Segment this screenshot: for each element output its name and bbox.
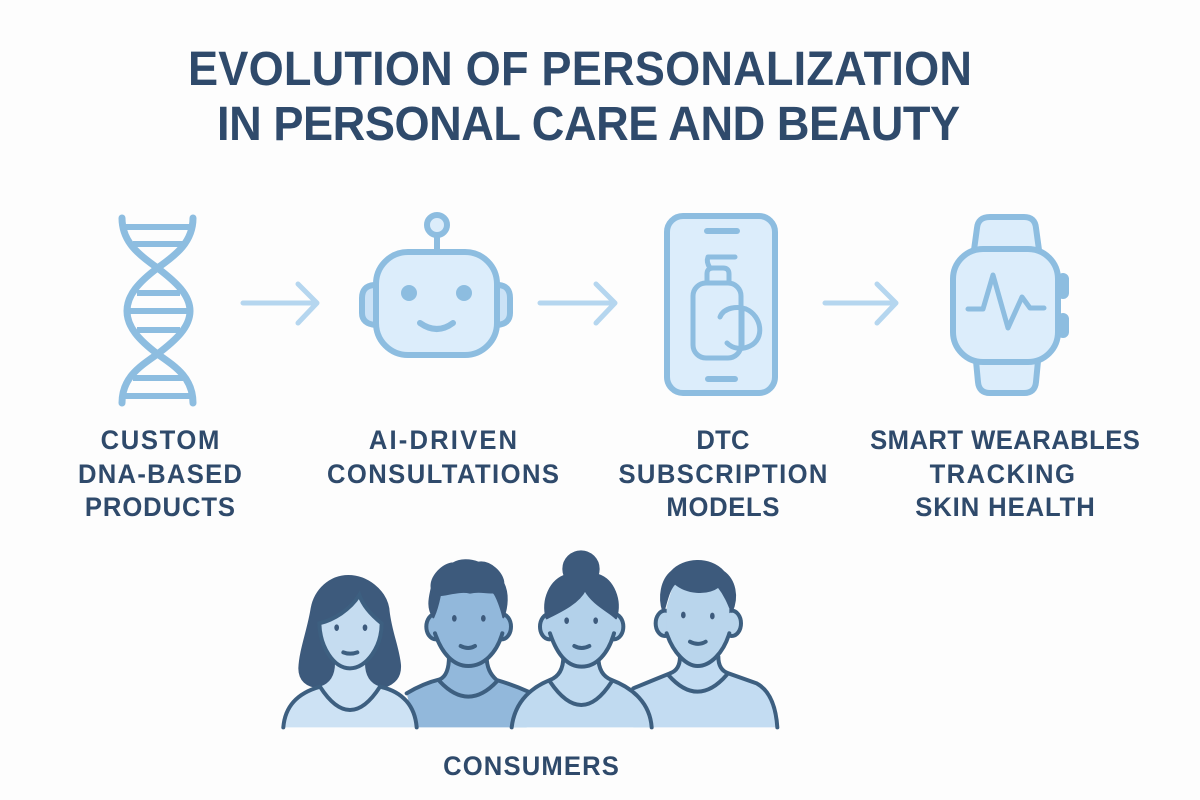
title: IN PERSONAL CARE AND BEAUTY [217, 97, 960, 150]
label: consumers: CONSUMERS [443, 750, 619, 781]
label: AI-driven consultations: CONSULTATIONS [327, 458, 559, 489]
title: EVOLUTION OF PERSONALIZATION [188, 42, 972, 95]
arrow: AI to DTC [540, 284, 615, 323]
label: DTC subscription models: DTC [696, 424, 750, 455]
label: AI-driven consultations: AI-DRIVEN [369, 424, 517, 455]
icon: smartwatch [953, 217, 1066, 393]
label: smart wearables tracking skin health: TRACKING [930, 458, 1075, 489]
label: custom DNA-based products: PRODUCTS [85, 491, 235, 522]
label: AI-driven consultations [327, 424, 559, 489]
person: man with curly hair [407, 560, 528, 727]
person: man, right [633, 561, 777, 727]
label: smart wearables tracking skin health: SKIN HEALTH [915, 491, 1095, 522]
label: smart wearables tracking skin health: SMART WEARABLES [870, 424, 1140, 455]
label: custom DNA-based products: DNA-BASED [78, 458, 242, 489]
person: woman with bun [512, 551, 652, 727]
label: custom DNA-based products: CUSTOM [101, 424, 219, 455]
person: woman with long hair [283, 576, 417, 727]
icon: phone with bottle [667, 216, 775, 393]
label: custom DNA-based products [78, 424, 242, 522]
label: DTC subscription models: SUBSCRIPTION [618, 458, 827, 489]
arrow: DNA to AI [243, 284, 317, 323]
consumers group [283, 551, 777, 727]
icon: DNA helix [122, 218, 193, 403]
label: DTC subscription models [618, 424, 827, 522]
title [188, 42, 972, 150]
icon: robot [362, 215, 510, 355]
label: smart wearables tracking skin health [870, 424, 1140, 522]
label: DTC subscription models: MODELS [666, 491, 779, 522]
arrow: DTC to wearables [825, 284, 896, 323]
